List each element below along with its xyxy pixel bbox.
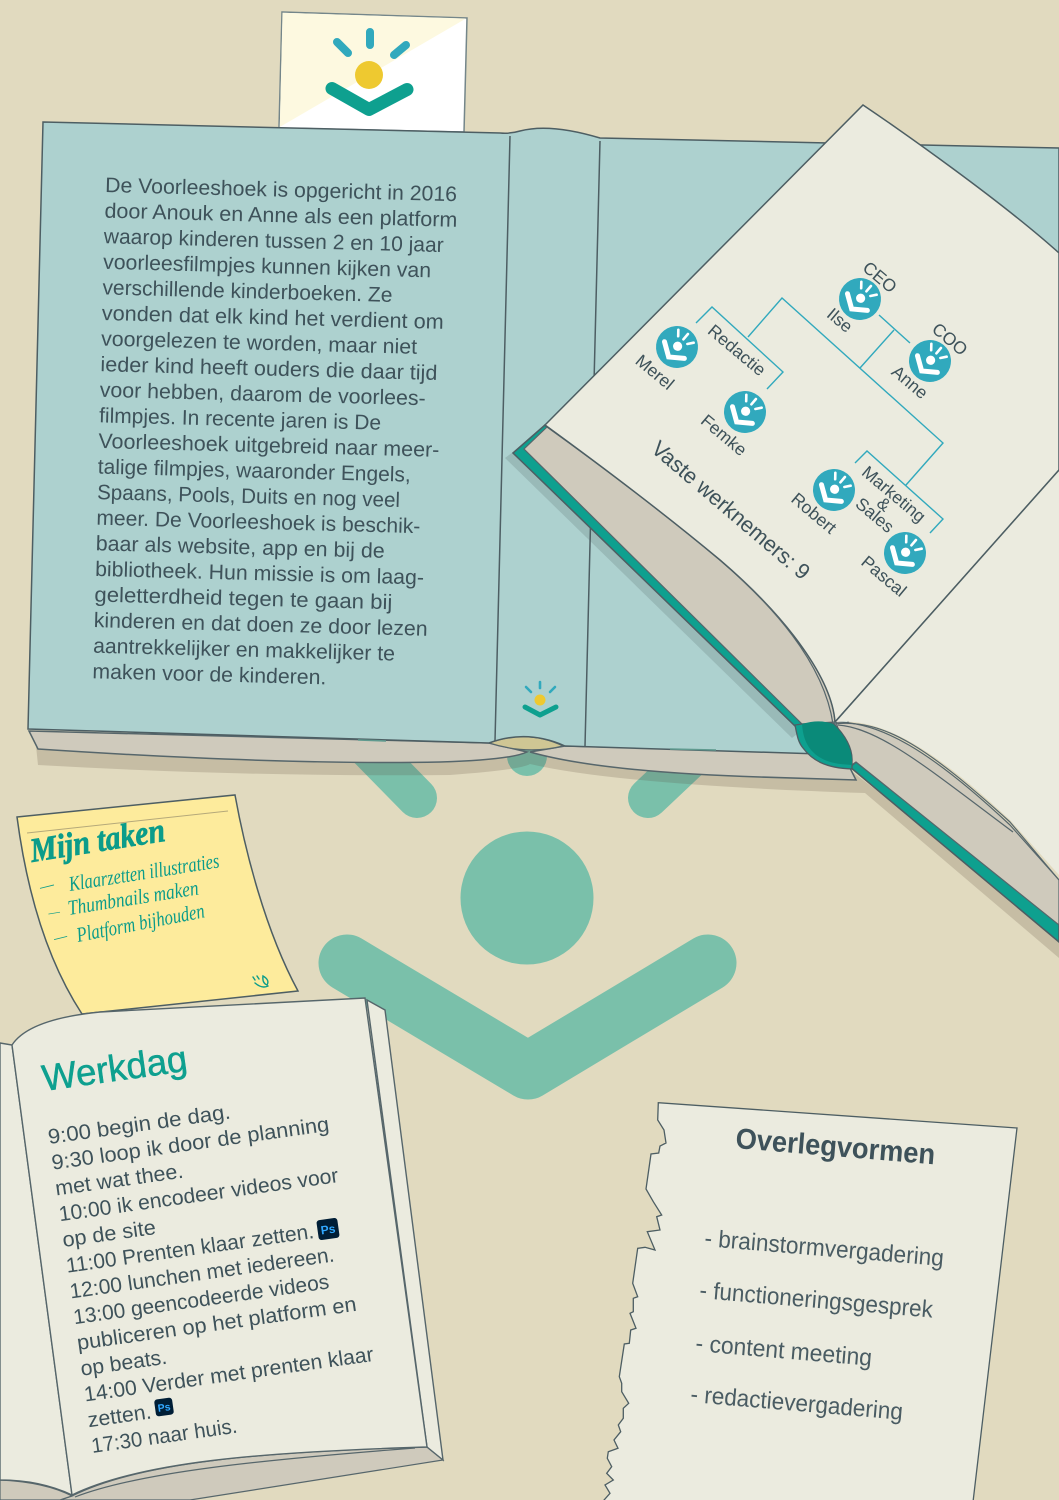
icon: Ilse [830, 269, 890, 329]
heading: Overlegvormen: Overlegvormen [734, 1123, 936, 1171]
main text block: De Voorleeshoek is opgericht in 2016 [105, 174, 457, 206]
workday schedule: op beats. [79, 1346, 168, 1381]
org labels: & [873, 493, 895, 516]
org labels [632, 257, 972, 601]
icon: Photoshop 1 [316, 1218, 340, 1240]
main text block: geletterdheid tegen te gaan bij [94, 583, 393, 614]
workday schedule: 9:00 begin de dag. [46, 1101, 232, 1149]
main text block: maken voor de kinderen. [92, 660, 327, 689]
icon: Anne [900, 331, 960, 391]
meeting types list [689, 1225, 945, 1426]
org chart [632, 257, 972, 601]
open book: shadow [36, 745, 1059, 958]
main text block: Spaans, Pools, Duits en nog veel [97, 481, 400, 512]
workday schedule: 9:30 loop ik door de planning [50, 1113, 331, 1175]
smiley doodle [253, 976, 268, 987]
workday schedule: zetten. [86, 1400, 153, 1432]
icon: Photoshop 2: Ps [157, 1401, 171, 1415]
org labels: Sales [852, 493, 898, 537]
icon: Photoshop 1: Ps [320, 1221, 337, 1237]
org chart lines [696, 298, 943, 533]
main text block: verschillende kinderboeken. Ze [102, 276, 393, 307]
open book: page edges [29, 731, 856, 780]
meeting types list: - brainstormvergadering [703, 1225, 945, 1272]
main text block [91, 174, 458, 692]
main text block: Voorleeshoek uitgebreid naar meer- [98, 430, 440, 462]
workday schedule: publiceren op het platform en [75, 1293, 358, 1355]
workday schedule: 13:00 geencodeerde videos [72, 1270, 331, 1329]
note heading: Mijn taken [27, 812, 168, 870]
main text block: ieder kind heeft ouders die daar tijd [100, 353, 438, 385]
heading: Werkdag: Werkdag [39, 1038, 190, 1099]
org labels: Pascal [857, 552, 910, 601]
main text block: voorgelezen te worden, maar niet [101, 328, 417, 359]
workday schedule [46, 1086, 382, 1458]
note list: — [46, 903, 61, 920]
flipped book: page stack upper [524, 427, 835, 724]
org labels: Anne [888, 361, 932, 403]
open book: spine hole [489, 737, 563, 750]
main text block: kinderen en dat doen ze door lezen [93, 609, 428, 641]
workday schedule: 10:00 ik encodeer videos voor [57, 1164, 340, 1226]
main text block: voor hebben, daarom de voorlees- [100, 379, 426, 410]
main text block: bibliotheek. Hun missie is om laag- [95, 558, 424, 589]
torn paper panel [602, 1103, 1017, 1500]
org labels: CEO [859, 257, 901, 297]
org labels: Redactie [704, 320, 770, 380]
small spine logo [525, 682, 556, 715]
note list: Klaarzetten illustraties [66, 848, 221, 896]
workday schedule: op de site [61, 1216, 157, 1252]
note list: — [37, 876, 57, 896]
note list: — [51, 928, 70, 947]
flipped book: cast shadow on blue page [505, 452, 802, 738]
icon: Femke [715, 382, 775, 442]
org labels: COO [928, 319, 972, 360]
workday schedule: 12:00 lunchen met iedereen. [68, 1243, 336, 1303]
org labels: Robert [787, 489, 841, 538]
main text block: voorleesfilmpjes kunnen kijken van [103, 251, 431, 282]
flipped book: cream page [545, 105, 1059, 722]
workday schedule: 14:00 Verder met prenten klaar [83, 1343, 375, 1406]
note list: Platform bijhouden [74, 899, 207, 947]
icon: Robert [804, 460, 864, 520]
small book: cream pages [0, 998, 443, 1495]
icon: Pascal [875, 523, 935, 583]
open book: blue pages [28, 122, 1059, 754]
org labels: Merel [632, 350, 678, 394]
org labels: Marketing [858, 462, 930, 526]
main text block: filmpjes. In recente jaren is De [99, 404, 381, 435]
large background logo [347, 720, 720, 1071]
flipped book: page stack lower [836, 722, 1059, 925]
flipped book: spine [795, 721, 852, 769]
main text block: talige filmpjes, waaronder Engels, [97, 456, 411, 487]
icon: Merel [647, 317, 707, 377]
icon: Photoshop 2 [154, 1397, 174, 1417]
workday schedule: 11:00 Prenten klaar zetten. [65, 1220, 315, 1278]
main text block: baar als website, app en bij de [95, 532, 385, 563]
main text block: aantrekkelijker en makkelijker te [93, 635, 395, 666]
meeting types list: - content meeting [694, 1330, 873, 1372]
note list: Thumbnails maken [66, 876, 200, 920]
employee count: Vaste werknemers: 9 [647, 436, 815, 585]
main text block: waarop kinderen tussen 2 en 10 jaar [103, 225, 444, 257]
sticky note [17, 795, 298, 1014]
main text block: door Anouk en Anne als een platform [104, 200, 458, 232]
flipped book: teal cover [513, 425, 802, 727]
note list [37, 848, 221, 947]
meeting types list: - redactievergadering [689, 1381, 904, 1426]
bookmark with logo [279, 12, 467, 132]
workday schedule: 17:30 naar huis. [90, 1415, 239, 1458]
main text block: vonden dat elk kind het verdient om [102, 302, 444, 334]
main text block: meer. De Voorleeshoek is beschik- [96, 507, 421, 538]
org labels: Ilse [823, 304, 857, 337]
workday schedule: met wat thee. [54, 1160, 185, 1200]
small book: page stack [0, 1447, 443, 1500]
meeting types list: - functioneringsgesprek [698, 1277, 935, 1324]
org labels: Femke [697, 410, 751, 460]
